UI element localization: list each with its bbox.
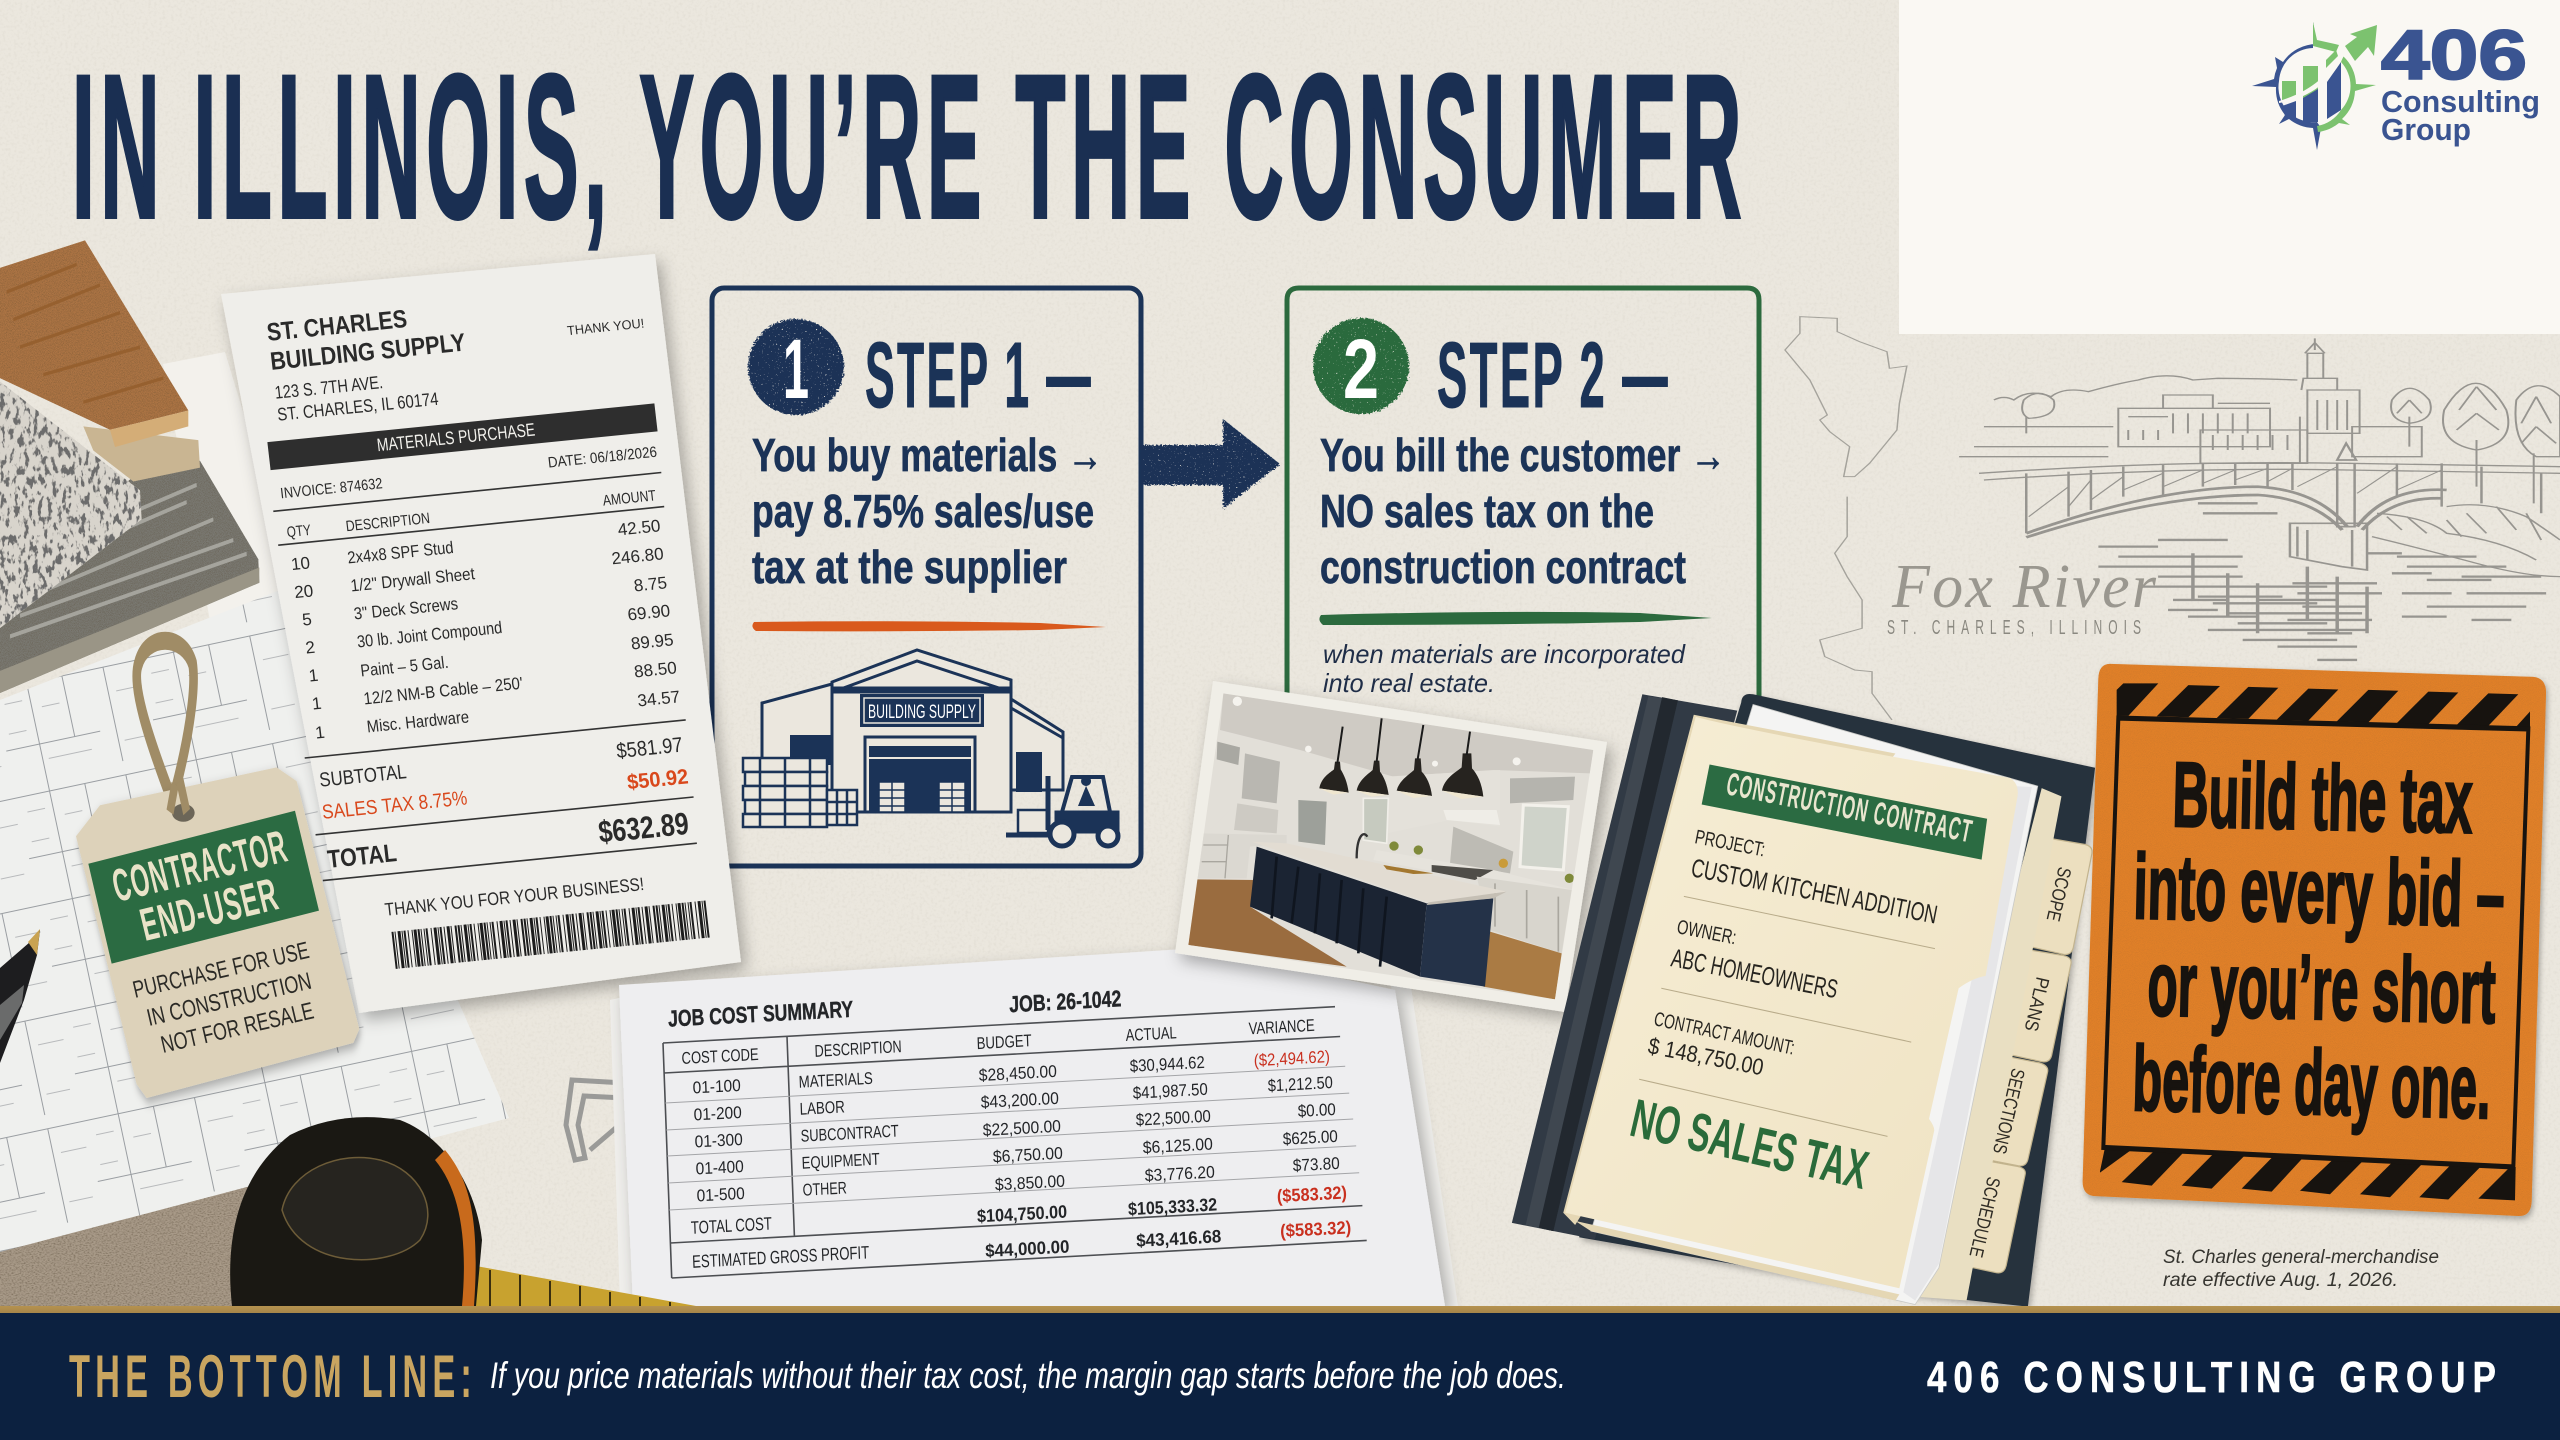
bottom line label: THE BOTTOM LINE: — [69, 1343, 477, 1410]
file tabs — [1959, 838, 2092, 1273]
invoice metadata: INVOICE: 874632 — [279, 475, 383, 502]
receipt: THANK YOU! — [566, 316, 645, 338]
job cost table: $3,776.20 — [1145, 1163, 1215, 1185]
blueprint sheet and table — [0, 590, 509, 1306]
job cost totals: ESTIMATED GROSS PROFIT — [692, 1242, 870, 1272]
job cost table: EQUIPMENT — [801, 1150, 880, 1173]
binder cover — [1512, 694, 2095, 1307]
receipt totals: $632.89 — [596, 806, 691, 850]
receipt totals: $50.92 — [626, 765, 690, 794]
receipt table: 34.57 — [636, 687, 681, 710]
receipt table: 2x4x8 SPF Stud — [346, 538, 455, 567]
tag text: NOT FOR RESALE — [158, 997, 316, 1059]
green brush stroke — [1319, 612, 1712, 625]
job cost table: $625.00 — [1282, 1127, 1338, 1149]
contract heading: CONSTRUCTION CONTRACT — [1724, 766, 1976, 849]
receipt table: 20 — [293, 581, 314, 602]
tag heading: CONTRACTOR — [107, 820, 292, 912]
logo panel — [1899, 0, 2560, 334]
icon: step 2 badge: 2 — [1343, 322, 1379, 416]
footnote: St. Charles general-merchandise — [2163, 1247, 2439, 1268]
store address — [274, 367, 440, 425]
Illinois map outline — [1785, 317, 1907, 720]
job cost table: $22,500.00 — [983, 1117, 1061, 1140]
contract details: PROJECT: — [1693, 826, 1767, 861]
step 2 note: into real estate. — [1323, 668, 1495, 698]
job cost totals: TOTAL COST — [691, 1214, 772, 1238]
kitchen photo — [1175, 681, 1607, 1012]
granite sample — [0, 382, 142, 628]
icon: building supply warehouse — [743, 650, 1118, 846]
receipt table: 1 — [314, 723, 326, 743]
job cost table: SUBCONTRACT — [800, 1121, 899, 1146]
receipt table: AMOUNT — [602, 487, 657, 510]
step 1 text — [752, 429, 1103, 593]
orange brush stroke — [752, 621, 1106, 631]
forklift — [1006, 776, 1118, 846]
logo: 406 Consulting Group: 406 — [2381, 16, 2527, 94]
invoice metadata — [279, 444, 658, 502]
job cost totals: $104,750.00 — [977, 1202, 1067, 1226]
job cost table — [663, 1005, 1367, 1278]
footnote — [2163, 1247, 2439, 1291]
tab labels: SCOPE — [2042, 865, 2074, 923]
panel: step 2 — [1287, 288, 1759, 720]
job cost table: VARIANCE — [1248, 1016, 1315, 1038]
receipt table: QTY — [286, 522, 312, 541]
icon: step 1 badge — [748, 319, 844, 416]
job cost table: BUDGET — [976, 1031, 1032, 1053]
job cost title: JOB COST SUMMARY — [668, 996, 854, 1032]
job cost table: ($2,494.62) — [1253, 1047, 1330, 1070]
panel: step 1 — [712, 288, 1141, 866]
receipt totals: SALES TAX 8.75% — [321, 787, 468, 824]
receipt table: 3" Deck Screws — [353, 594, 459, 623]
receipt table — [273, 472, 704, 881]
tag text: PURCHASE FOR USE — [130, 937, 312, 1004]
job cost table: 01-100 — [692, 1076, 741, 1097]
job cost table: $0.00 — [1297, 1100, 1336, 1121]
papers — [1563, 704, 2061, 1305]
job cost table: $22,500.00 — [1135, 1107, 1211, 1130]
job cost table: OTHER — [802, 1178, 847, 1200]
contract details: CONTRACT AMOUNT: — [1652, 1008, 1796, 1060]
no sales tax: NO SALES TAX — [1625, 1088, 1874, 1201]
Fox River caption: Fox River — [1891, 553, 2157, 621]
receipt totals: TOTAL — [326, 839, 398, 874]
receipt table: 10 — [290, 553, 311, 574]
job cost table: $3,850.00 — [995, 1172, 1065, 1194]
step 2 text: You bill the customer → — [1320, 429, 1726, 481]
footnote: rate effective Aug. 1, 2026. — [2163, 1270, 2398, 1291]
tag text: IN CONSTRUCTION — [144, 968, 314, 1032]
job cost table: COST CODE — [681, 1045, 759, 1068]
store name: ST. CHARLES — [265, 305, 409, 347]
step 2 text — [1320, 429, 1726, 593]
job cost table: ACTUAL — [1125, 1023, 1177, 1045]
job cost title: JOB: 26-1042 — [1009, 985, 1122, 1017]
logo: 406 Consulting Group: Consulting — [2381, 84, 2540, 119]
receipt table: Misc. Hardware — [366, 707, 470, 736]
rope loop — [137, 641, 194, 795]
job cost totals: ($583.32) — [1277, 1182, 1347, 1206]
job cost totals: $44,000.00 — [985, 1237, 1070, 1261]
hazard stripes — [2100, 683, 2530, 1200]
receipt table: 5 — [301, 610, 313, 630]
receipt table: 1 — [308, 666, 319, 686]
pendant lights — [1319, 718, 1483, 799]
binder clip — [566, 1080, 625, 1160]
warning sign — [2083, 664, 2546, 1216]
receipt totals: $581.97 — [615, 734, 684, 763]
receipt table: 246.80 — [611, 544, 665, 568]
thank you line: THANK YOU FOR YOUR BUSINESS! — [384, 874, 645, 920]
job cost summary — [610, 948, 1458, 1306]
receipt table: 1 — [311, 694, 322, 714]
step 2 note — [1323, 639, 1686, 698]
tab labels: SCHEDULE — [1965, 1175, 2003, 1259]
tan laminate — [83, 426, 200, 481]
pallets — [743, 758, 857, 827]
contract details: ABC HOMEOWNERS — [1669, 942, 1840, 1004]
sheet behind receipt — [163, 352, 330, 730]
receipt table: 30 lb. Joint Compound — [356, 618, 503, 651]
step 2 text: construction contract — [1320, 541, 1686, 593]
wood sample — [0, 240, 188, 447]
materials purchase band — [267, 403, 658, 470]
bottom line bar — [0, 1306, 2560, 1440]
job cost table: DESCRIPTION — [814, 1037, 902, 1061]
icon: step 1 badge: 1 — [783, 322, 809, 416]
contractor tag — [76, 641, 359, 1098]
job cost totals: $105,333.32 — [1128, 1194, 1217, 1219]
step 2 note: when materials are incorporated — [1323, 639, 1686, 669]
job cost table: $41,987.50 — [1132, 1080, 1208, 1103]
receipt table: 2 — [304, 638, 316, 658]
tag heading: END-USER — [135, 867, 283, 951]
job cost table: LABOR — [799, 1097, 845, 1119]
material samples — [0, 240, 259, 693]
receipt table: 12/2 NM-B Cable – 250' — [363, 674, 524, 708]
job cost title — [668, 981, 1122, 1036]
job cost table: 01-500 — [696, 1184, 745, 1205]
job cost totals — [691, 1182, 1352, 1277]
contract binder — [1512, 694, 2095, 1307]
receipt table: 89.95 — [630, 630, 675, 653]
pencil sketch: Fox River bridge — [1959, 338, 2560, 660]
contract details: $ 148,750.00 — [1646, 1032, 1766, 1080]
tab labels — [1965, 865, 2074, 1259]
store name — [265, 300, 467, 376]
job cost table: $28,450.00 — [978, 1062, 1057, 1085]
job cost table: $1,212.50 — [1267, 1073, 1333, 1095]
store address: ST. CHARLES, IL 60174 — [276, 389, 440, 425]
tag heading — [107, 820, 292, 951]
receipt — [221, 254, 741, 1013]
job cost table: $73.80 — [1292, 1154, 1340, 1175]
Fox River caption: ST. CHARLES, ILLINOIS — [1887, 617, 2147, 639]
job cost table: $30,944.62 — [1129, 1053, 1205, 1076]
job cost table: $6,750.00 — [993, 1144, 1063, 1166]
job cost totals: $43,416.68 — [1136, 1226, 1222, 1251]
contract details: OWNER: — [1675, 916, 1738, 949]
job cost table: MATERIALS — [798, 1069, 873, 1092]
contract details: CUSTOM KITCHEN ADDITION — [1689, 852, 1940, 930]
receipt table: 8.75 — [633, 573, 668, 595]
job cost table: 01-300 — [694, 1130, 743, 1151]
receipt table: DESCRIPTION — [345, 510, 431, 535]
manila folder — [1565, 717, 2018, 1288]
receipt table: Paint – 5 Gal. — [359, 653, 450, 680]
logo: 406 Consulting Group — [2252, 16, 2540, 150]
receipt totals: SUBTOTAL — [318, 761, 408, 792]
bottom line message: If you price materials without their tax cost, the margin gap starts before the job does. — [490, 1355, 1566, 1396]
receipt table: 69.90 — [627, 601, 671, 624]
panel: step 1: STEP 1 — — [865, 323, 1093, 427]
tab labels: PLANS — [2020, 975, 2052, 1033]
tape measure — [230, 1117, 696, 1306]
barcode — [394, 919, 708, 950]
step 1 text: pay 8.75% sales/use — [752, 485, 1094, 537]
tab labels: SEECTIONS — [1988, 1066, 2028, 1156]
gray wood plank — [0, 461, 259, 693]
sign message — [2132, 744, 2506, 1138]
step 1 text: tax at the supplier — [752, 541, 1067, 593]
receipt totals — [317, 733, 696, 877]
icon: building supply warehouse: BUILDING SUPPLY — [868, 702, 976, 723]
step 2 text: NO sales tax on the — [1320, 485, 1654, 537]
store name: BUILDING SUPPLY — [269, 329, 467, 376]
receipt table: 1/2" Drywall Sheet — [350, 564, 476, 595]
job cost table: 01-400 — [695, 1157, 744, 1178]
contract details — [1646, 826, 1940, 1080]
receipt table: 42.50 — [617, 516, 661, 539]
materials purchase band: MATERIALS PURCHASE — [376, 420, 536, 455]
job cost table: $6,125.00 — [1142, 1135, 1213, 1157]
arrow: step 1 to step 2 — [1141, 419, 1280, 509]
job cost totals: ($583.32) — [1280, 1217, 1352, 1241]
receipt table: 88.50 — [633, 658, 678, 681]
job cost table: 01-200 — [693, 1103, 742, 1124]
logo: 406 Consulting Group: Group — [2381, 112, 2471, 147]
step 1 text: You buy materials → — [752, 429, 1103, 481]
job cost table: $43,200.00 — [980, 1089, 1059, 1112]
icon: step 2 badge — [1313, 318, 1409, 416]
pen — [0, 929, 40, 1063]
invoice metadata: DATE: 06/18/2026 — [547, 444, 658, 472]
panel: step 2: STEP 2 — — [1437, 323, 1670, 427]
store address: 123 S. 7TH AVE. — [274, 372, 384, 403]
tag text — [130, 937, 316, 1059]
